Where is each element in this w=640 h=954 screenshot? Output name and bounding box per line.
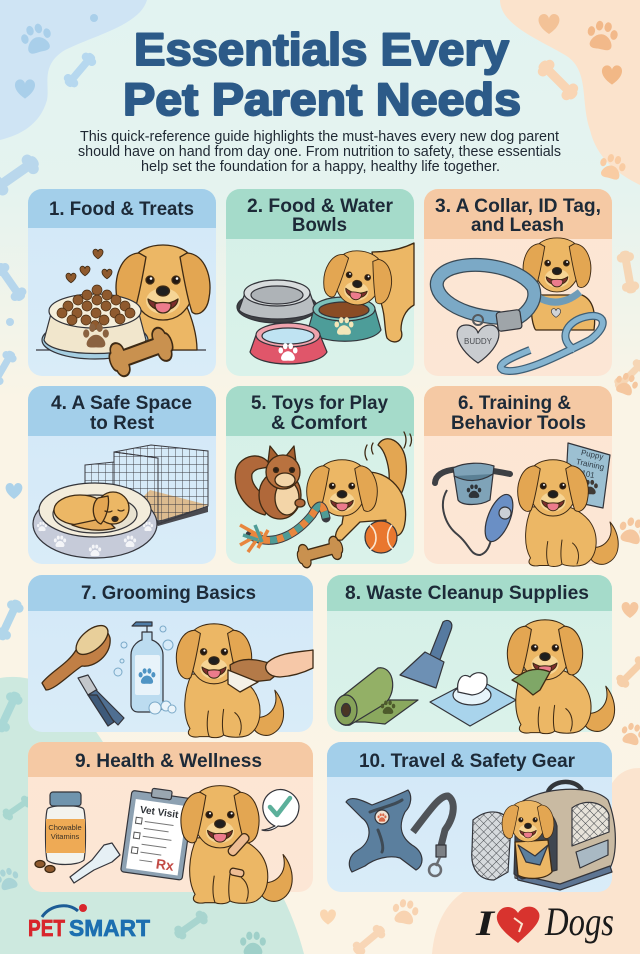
panel 5 background — [226, 386, 414, 564]
title — [123, 24, 521, 125]
clicker with cord — [443, 490, 519, 555]
panel 9 header — [28, 742, 313, 777]
panel 3 background — [424, 189, 612, 376]
nail clippers — [78, 675, 124, 726]
background blob: bottom right — [432, 768, 640, 954]
vitamin bottle — [46, 792, 86, 864]
logo: I love Dogs: Dogs — [544, 899, 614, 944]
panel 3 header — [424, 189, 612, 239]
logo: PetSmart: PET — [28, 915, 65, 941]
playing dog — [307, 432, 412, 540]
panel 2 header — [226, 189, 414, 239]
intro text: should have on hand from day one. From nutrition to safety, these essentials — [78, 143, 561, 160]
training book: Training — [575, 457, 605, 472]
logo: PetSmart — [28, 904, 150, 941]
panel 8: waste cleanup supplies — [327, 575, 615, 734]
panel 4 heading: 4. A Safe Space — [51, 392, 192, 414]
panel 8 background — [327, 575, 612, 732]
dog body — [372, 243, 414, 342]
panel 4 heading: to Rest — [90, 412, 154, 434]
background blob: top right — [500, 0, 640, 185]
dog with collar — [523, 238, 595, 330]
panel 6 background — [424, 386, 612, 564]
panel 5 header — [226, 386, 414, 436]
logo: I love Dogs: I — [475, 903, 497, 943]
panel 4: a safe space to rest — [28, 386, 216, 564]
panel 2 heading: 2. Food & Water — [247, 195, 393, 217]
sleeping puppy — [54, 492, 129, 530]
panel 4 heading — [51, 392, 192, 434]
panel 5: toys for play and comfort — [226, 386, 414, 569]
food bowl — [42, 285, 148, 359]
vet clipboard: Vet Visit — [139, 805, 180, 821]
dog head drinking — [321, 246, 395, 309]
panel 6 heading: Behavior Tools — [451, 412, 586, 434]
panel 9 background — [28, 742, 313, 892]
panel 1 background — [28, 189, 216, 376]
leash — [501, 316, 603, 371]
plush squirrel — [235, 446, 305, 519]
panel 4 background — [28, 386, 216, 564]
heart name tag — [457, 315, 499, 363]
intro text: This quick-reference guide highlights the must-haves every new dog parent — [80, 128, 560, 145]
wooden brush — [42, 620, 113, 690]
panel 7 header — [28, 575, 313, 611]
panel 6 header — [424, 386, 612, 436]
teal food bowl — [308, 297, 381, 341]
panel 3 heading — [435, 195, 601, 236]
panel 10 header — [327, 742, 612, 777]
panel 5 heading: & Comfort — [271, 412, 368, 434]
panel 9: health and wellness — [28, 742, 313, 904]
background blob: top left — [0, 0, 147, 140]
panel 9 heading: 9. Health & Wellness — [75, 750, 262, 772]
panel 3 heading: and Leash — [471, 214, 564, 236]
pet carrier — [472, 782, 615, 890]
speech bubble with check — [262, 790, 299, 831]
pills — [35, 860, 55, 872]
rope toy — [240, 506, 326, 552]
vitamin bottle: Vitamins — [51, 832, 80, 841]
panel 2 heading — [247, 195, 393, 236]
dog with bandages — [181, 786, 292, 904]
bone biscuit — [105, 325, 177, 379]
hand holding brush — [228, 650, 313, 692]
flea treatment applicator — [70, 843, 120, 883]
panel 1: food and treats — [28, 189, 216, 379]
falling kibble — [66, 249, 112, 283]
panel 6: training and behavior tools — [424, 386, 618, 566]
shampoo bottle — [114, 622, 176, 714]
panel 10 background — [327, 742, 612, 892]
panel 10: travel and safety gear — [327, 742, 615, 892]
panel 8 header — [327, 575, 612, 611]
panel 5 heading: 5. Toys for Play — [251, 392, 388, 414]
treat pouch — [435, 463, 510, 504]
panel 2: food and water bowls — [226, 189, 414, 376]
panel 2 background — [226, 189, 414, 376]
training book: Puppy — [580, 448, 604, 461]
wire crate — [85, 445, 208, 526]
bone treat — [295, 535, 345, 569]
pink water bowl — [250, 323, 327, 364]
dog with tongue out — [36, 245, 210, 350]
tennis ball — [365, 521, 397, 553]
panel 7 background — [28, 575, 313, 732]
seatbelt tether — [413, 796, 453, 876]
logo: PetSmart: SMART — [69, 915, 150, 941]
intro text — [78, 128, 561, 175]
dog harness — [346, 790, 422, 872]
title: Essentials Every — [134, 24, 509, 75]
large collar — [437, 265, 534, 332]
training book: 101 — [581, 469, 596, 480]
golden retriever — [176, 624, 284, 738]
panel 1 header — [28, 189, 216, 228]
dog with cloth — [507, 620, 615, 734]
panel 5 heading — [251, 392, 388, 434]
panel 7 heading: 7. Grooming Basics — [81, 582, 256, 604]
panel 1 heading: 1. Food & Treats — [49, 198, 194, 220]
panel 2 heading: Bowls — [292, 214, 347, 236]
panel 3 heading: 3. A Collar, ID Tag, — [435, 195, 601, 217]
panel 4 header — [28, 386, 216, 436]
small dog in carrier — [502, 801, 554, 878]
panel 6 heading: 6. Training & — [458, 392, 571, 414]
sitting dog — [518, 460, 618, 566]
title: Pet Parent Needs — [123, 74, 521, 125]
wipes pack — [430, 673, 516, 726]
steel bowl — [237, 280, 317, 323]
intro text: help set the foundation for a happy, healthy life together. — [141, 158, 500, 175]
dog bed — [33, 483, 157, 558]
panel 7: grooming basics — [28, 575, 313, 738]
panel 3: collar, ID tag and leash — [424, 189, 612, 376]
vitamin bottle: Chowable — [48, 823, 82, 832]
panel 6 heading — [451, 392, 586, 434]
panel 10 heading: 10. Travel & Safety Gear — [359, 750, 575, 772]
vet clipboard — [121, 785, 194, 880]
pooper scoop — [400, 620, 452, 688]
logo: I love Dogs — [475, 899, 614, 944]
background blob: bottom left — [0, 677, 304, 954]
training book — [565, 443, 610, 508]
waste bag roll — [335, 668, 418, 725]
panel 8 heading: 8. Waste Cleanup Supplies — [345, 582, 589, 604]
heart name tag: BUDDY — [464, 337, 493, 346]
vet clipboard: Rx — [155, 856, 175, 874]
